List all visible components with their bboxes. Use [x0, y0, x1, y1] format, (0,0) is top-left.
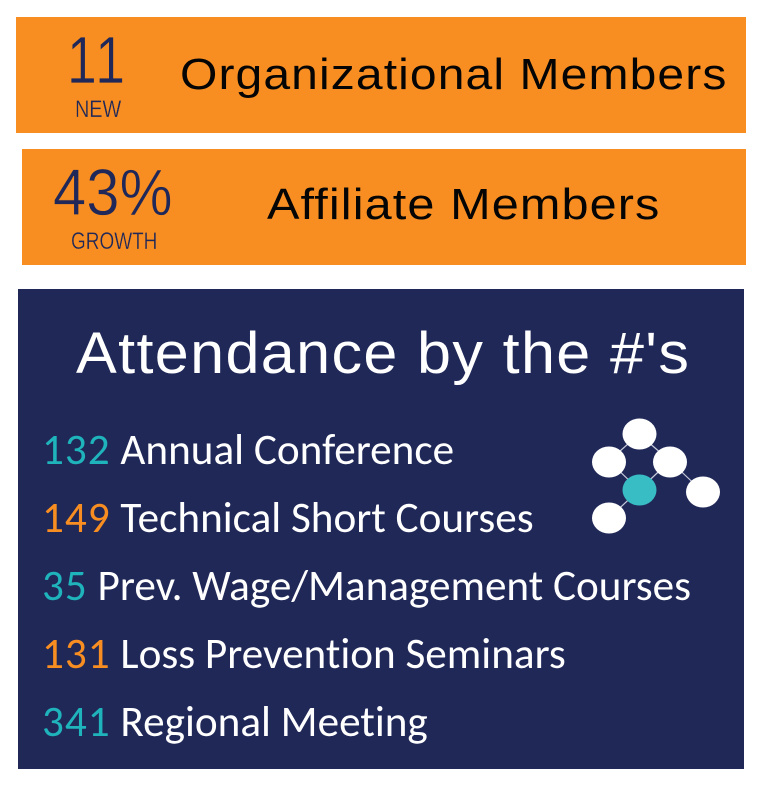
list item: loss prevention seminars: 131 Loss Prevention Seminars [42, 627, 566, 680]
label: growth: GROWTH [70, 228, 157, 255]
heading: organizational members: Organizational Members [180, 50, 727, 98]
heading: affiliate members: Affiliate Members [267, 180, 660, 229]
list item: annual conference: 132 Annual Conference [42, 423, 454, 476]
stat: 11: 11 [67, 22, 127, 98]
heading: attendance by the numbers: Attendance by the #'s [76, 321, 690, 386]
panel: organizational members [16, 17, 746, 133]
label: new: NEW [75, 96, 121, 122]
list item: prevailing wage and management courses: 35 Prev. Wage/Management Courses [42, 559, 691, 612]
list item: regional meeting: 341 Regional Meeting [42, 695, 428, 748]
list item: technical short courses: 149 Technical Short Courses [42, 491, 534, 544]
stat: 43%: 43% [53, 155, 173, 229]
panel: affiliate members [22, 149, 746, 265]
icon: network of nodes [592, 418, 720, 534]
panel: attendance [18, 289, 744, 769]
